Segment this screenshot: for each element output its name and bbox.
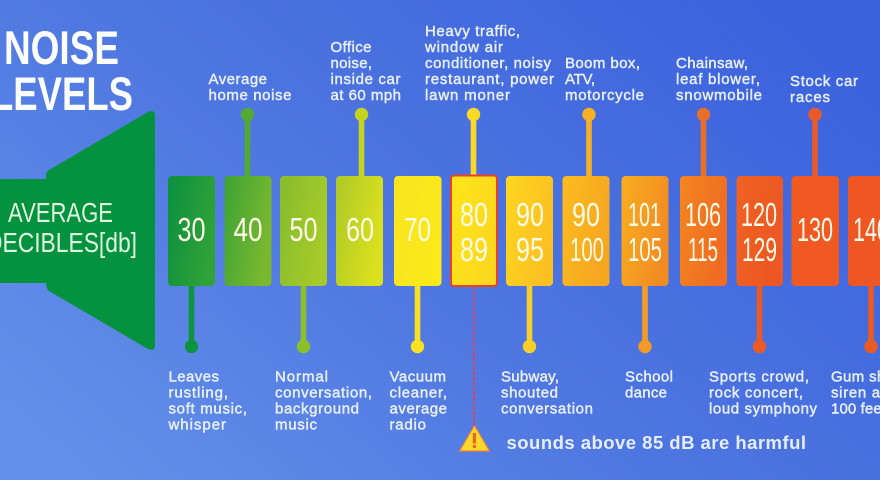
level 101-105: 105: [628, 231, 662, 268]
label: chainsaw: Chainsaw,: [676, 55, 748, 72]
level 106-115: 106: [685, 196, 721, 233]
speaker label: AVERAGE: [8, 197, 113, 228]
label: stock car races: races: [790, 89, 830, 106]
label: normal conversation: Normal: [275, 368, 328, 386]
label: office noise: Office: [330, 39, 372, 56]
label: normal conversation: music: [275, 416, 318, 434]
level 106-115: 115: [688, 231, 718, 268]
label: normal conversation: [275, 368, 372, 434]
label: heavy traffic: restaurant, power: [425, 71, 554, 88]
label: vacuum cleaner: [390, 368, 447, 434]
level 30: 30: [178, 211, 206, 248]
label: subway: Subway,: [501, 368, 559, 386]
label: vacuum cleaner: cleaner,: [390, 384, 447, 402]
level 70: 70: [404, 211, 431, 248]
icon: warning triangle: [460, 426, 490, 451]
label: school dance: [625, 368, 673, 402]
label: average home noise: home noise: [208, 87, 292, 104]
label: leaves rustling: whisper: [168, 416, 226, 434]
label: boom box: motorcycle: [565, 87, 644, 104]
warning message: sounds above 85 dB are harmful: [506, 432, 806, 453]
speaker horn: [0, 111, 155, 350]
label: vacuum cleaner: radio: [390, 416, 426, 434]
level 101-105: 101: [628, 196, 661, 233]
label: office noise: noise,: [330, 55, 372, 72]
level 80-89, highlighted: 89: [460, 231, 488, 268]
label: vacuum cleaner: average: [390, 400, 447, 418]
label: chainsaw: [676, 55, 762, 104]
label: normal conversation: conversation,: [275, 384, 372, 402]
level 106-115: [680, 108, 727, 286]
level 90-100: [562, 108, 610, 286]
label: heavy traffic: conditioner, noisy: [425, 55, 552, 72]
level 70: [394, 176, 442, 353]
level 90-100: 100: [570, 231, 604, 268]
label: subway: conversation: [501, 400, 593, 418]
label: average home noise: [208, 71, 292, 104]
label: normal conversation: background: [275, 400, 359, 418]
level 50: [280, 176, 327, 353]
level 90-95: 90: [516, 196, 544, 233]
title: NOISE: [4, 21, 119, 74]
label: heavy traffic: [424, 23, 554, 104]
level 120-129: 120: [741, 196, 777, 233]
level 120-129: [736, 176, 783, 353]
level 80-89, highlighted: [451, 108, 497, 286]
label: leaves rustling: soft music,: [168, 400, 247, 418]
label: stock car races: Stock car: [790, 73, 858, 90]
label: average home noise: Average: [208, 71, 267, 88]
label: heavy traffic: Heavy traffic,: [425, 23, 520, 40]
level 40: [224, 108, 272, 286]
level 90-100: 90: [572, 196, 600, 233]
level 60: 60: [346, 211, 374, 248]
dotted warning line: [473, 287, 475, 426]
level 40: 40: [234, 211, 262, 248]
level 30: [168, 176, 215, 353]
label: boom box: ATV,: [565, 71, 595, 88]
label: subway: shouted: [501, 384, 558, 402]
level 130: [792, 108, 839, 286]
label: heavy traffic: lawn moner: [425, 87, 510, 104]
label: office noise: inside car: [330, 71, 400, 88]
label: sports crowd: [709, 368, 818, 418]
label: vacuum cleaner: Vacuum: [390, 368, 446, 386]
label: leaves rustling: rustling,: [168, 384, 228, 402]
label: stock car races: [790, 73, 858, 106]
level 90-95: 95: [516, 231, 544, 268]
title: [0, 21, 133, 120]
label: leaves rustling: [168, 368, 247, 434]
level 101-105: [622, 176, 668, 353]
level 50: 50: [290, 211, 318, 248]
label: school dance: School: [625, 368, 673, 386]
label: heavy traffic: window air: [424, 39, 503, 56]
level 140: [848, 176, 880, 353]
label: chainsaw: leaf blower,: [676, 71, 760, 88]
level 90-95: [506, 176, 553, 353]
label: sports crowd: Sports crowd,: [709, 368, 809, 386]
level 120-129: 129: [742, 231, 777, 268]
level 60: [336, 108, 383, 286]
label: school dance: dance: [625, 384, 667, 402]
label: office noise: [330, 39, 401, 104]
label: office noise: at 60 mph: [330, 87, 401, 104]
level 80-89, highlighted: 80: [460, 196, 488, 233]
label: sports crowd: rock concert,: [709, 384, 803, 402]
label: boom box: [565, 55, 644, 104]
label: boom box: Boom box,: [565, 55, 640, 72]
level 130: 130: [797, 211, 833, 248]
label: chainsaw: snowmobile: [676, 87, 762, 104]
label: leaves rustling: Leaves: [168, 368, 219, 386]
label: gum shots: [831, 368, 880, 418]
speaker label: [0, 197, 137, 258]
label: sports crowd: loud symphony: [709, 400, 818, 418]
label: subway: [501, 368, 593, 418]
